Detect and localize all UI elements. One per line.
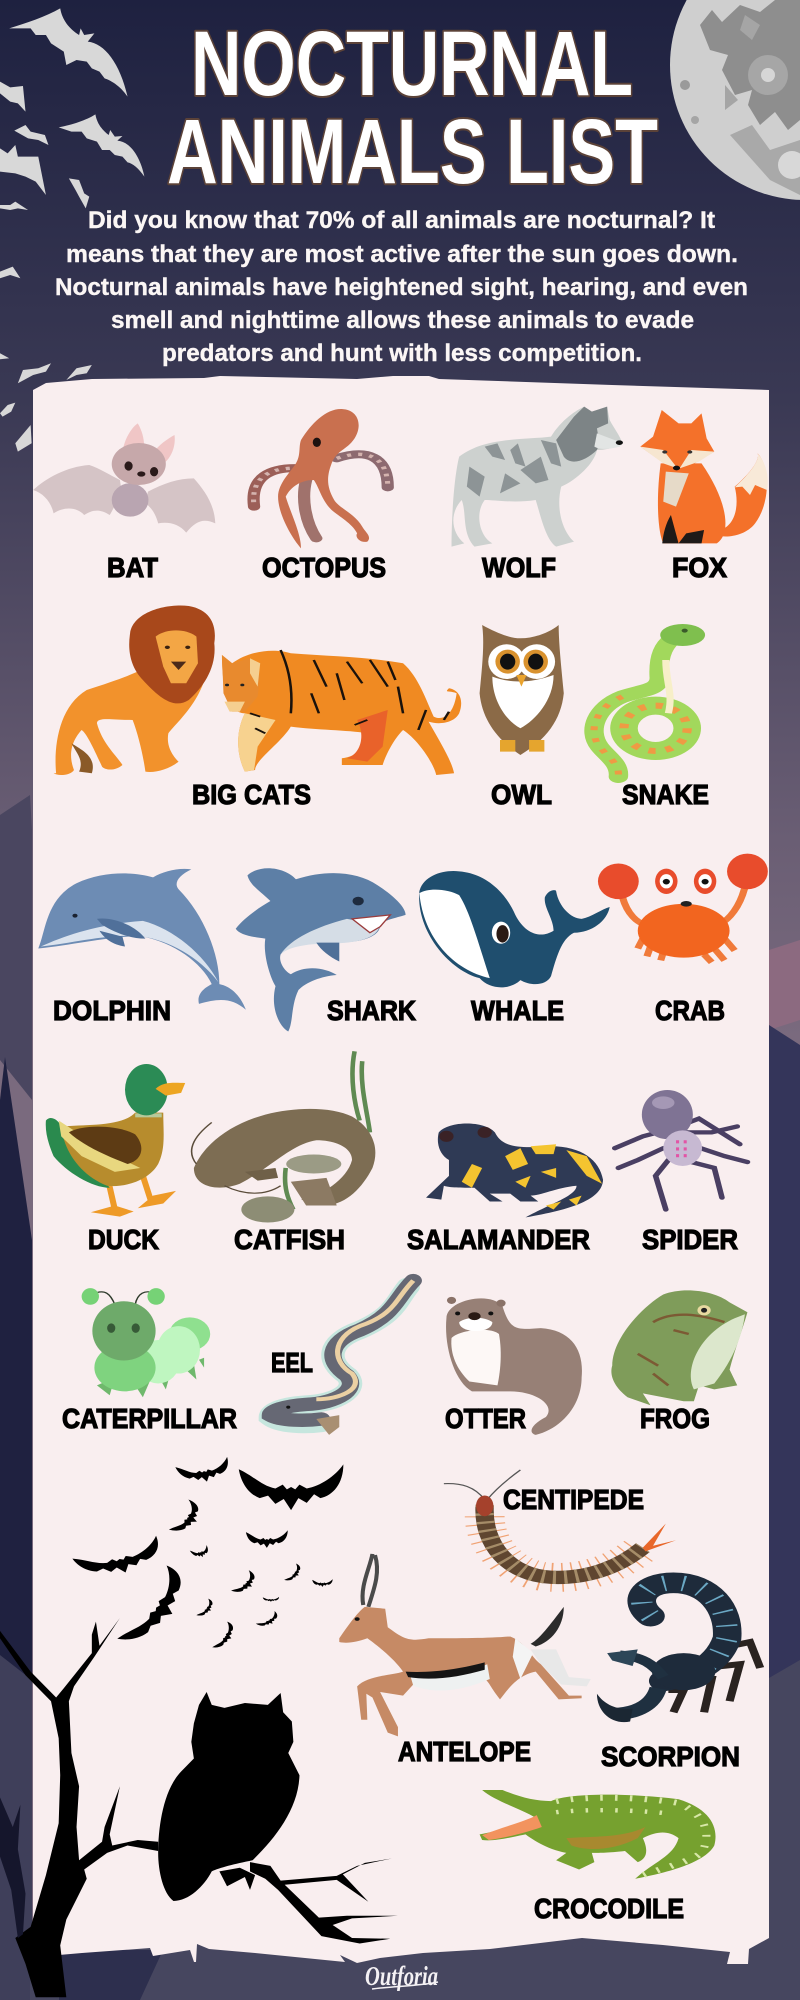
icon: large bat bbox=[9, 8, 128, 97]
label: bat: BAT bbox=[107, 552, 158, 583]
icon: centipede bbox=[444, 1470, 676, 1577]
footer logo: Outforia: Outforia bbox=[365, 1961, 438, 1991]
label: shark: SHARK bbox=[327, 995, 416, 1026]
label: crab: CRAB bbox=[655, 995, 725, 1026]
label: salamander: SALAMANDER bbox=[407, 1224, 590, 1255]
label: otter: OTTER bbox=[445, 1403, 526, 1434]
icon: salamander bbox=[426, 1123, 603, 1217]
icon: crocodile bbox=[480, 1790, 716, 1879]
animal: frog bbox=[611, 1290, 747, 1434]
label: spider: SPIDER bbox=[642, 1224, 738, 1255]
label: duck: DUCK bbox=[88, 1224, 159, 1255]
animal: catfish bbox=[192, 1051, 375, 1255]
animal: fox bbox=[640, 410, 768, 583]
icon: otter bbox=[446, 1297, 582, 1435]
decorative flock of pale bats bbox=[0, 8, 144, 452]
icon: antelope bbox=[339, 1554, 591, 1736]
label: caterpillar: CATERPILLAR bbox=[62, 1403, 237, 1434]
owl body bbox=[158, 1692, 299, 1901]
label: dolphin: DOLPHIN bbox=[53, 995, 171, 1026]
tree trunk and upper branches bbox=[0, 1618, 158, 1997]
animal: owl bbox=[480, 625, 564, 810]
intro text block: means that they are most active after the sun goes down. bbox=[66, 241, 738, 268]
label: snake: SNAKE bbox=[622, 779, 709, 810]
icon: octopus bbox=[254, 409, 388, 548]
icon: caterpillar bbox=[82, 1288, 210, 1397]
silhouette: owl on bare tree bbox=[0, 1618, 398, 1997]
animal: big cats bbox=[54, 606, 461, 810]
animal: snake bbox=[594, 624, 709, 810]
label: whale: WHALE bbox=[471, 995, 564, 1026]
icon: second bat bbox=[59, 114, 144, 177]
icon: shark bbox=[236, 868, 406, 1032]
title: ANIMALS LIST bbox=[167, 101, 658, 203]
icon: frog bbox=[611, 1290, 747, 1405]
icon: owl bbox=[480, 625, 564, 755]
animal: crab bbox=[598, 854, 768, 1026]
icon: spider bbox=[615, 1090, 747, 1209]
animal: bat bbox=[33, 423, 215, 583]
icon: whale bbox=[419, 871, 610, 987]
animal: otter bbox=[445, 1297, 582, 1435]
icon: snake bbox=[594, 624, 705, 777]
title: NOCTURNAL bbox=[191, 13, 633, 115]
animal: spider bbox=[615, 1090, 747, 1255]
icon: duck bbox=[46, 1064, 185, 1217]
intro text block: smell and nighttime allows these animals to evade bbox=[111, 307, 694, 334]
label: crocodile: CROCODILE bbox=[534, 1893, 684, 1924]
lower right branch bbox=[250, 1858, 398, 1944]
intro text block: Did you know that 70% of all animals are nocturnal? It bbox=[88, 207, 715, 234]
label: frog: FROG bbox=[640, 1403, 710, 1434]
animal: caterpillar bbox=[62, 1288, 237, 1434]
animal: duck bbox=[46, 1064, 185, 1255]
label: catfish: CATFISH bbox=[234, 1224, 345, 1255]
animal: scorpion bbox=[597, 1583, 760, 1772]
icon: eel bbox=[270, 1281, 413, 1435]
icon: catfish bbox=[192, 1051, 375, 1223]
icon: tiger bbox=[222, 650, 461, 775]
icon: scorpion bbox=[597, 1583, 760, 1722]
animal: crocodile bbox=[480, 1790, 716, 1924]
label: owl: OWL bbox=[491, 779, 552, 810]
label: scorpion: SCORPION bbox=[601, 1741, 740, 1772]
label: antelope: ANTELOPE bbox=[398, 1736, 531, 1767]
icon: wolf bbox=[452, 407, 623, 547]
label: octopus: OCTOPUS bbox=[262, 552, 386, 583]
icon: lion bbox=[54, 606, 215, 775]
icon: fox bbox=[640, 410, 768, 543]
panel: torn paper background bbox=[33, 376, 769, 1964]
animal: eel bbox=[270, 1281, 413, 1435]
intro text block: predators and hunt with less competition. bbox=[162, 340, 642, 367]
animal: octopus bbox=[254, 409, 388, 583]
icon: full moon bbox=[670, 0, 800, 200]
animal: salamander bbox=[407, 1123, 603, 1255]
animal: shark bbox=[236, 868, 416, 1032]
icon: dolphin bbox=[38, 869, 246, 1010]
animal: wolf bbox=[452, 407, 623, 583]
animal: centipede bbox=[444, 1470, 676, 1577]
icon: crab bbox=[598, 854, 768, 962]
animal: dolphin bbox=[38, 869, 246, 1026]
animal: whale bbox=[419, 871, 610, 1026]
label: big cats: BIG CATS bbox=[192, 779, 311, 810]
animal: antelope bbox=[339, 1554, 591, 1767]
icon: bat bbox=[33, 423, 215, 533]
intro text block: Nocturnal animals have heightened sight, hearing, and even bbox=[55, 274, 748, 301]
label: wolf: WOLF bbox=[482, 552, 556, 583]
label: eel: EEL bbox=[271, 1347, 313, 1378]
silhouette: flock of black bats bbox=[71, 1457, 343, 1651]
label: fox: FOX bbox=[672, 552, 727, 583]
title bbox=[167, 13, 658, 203]
label: centipede: CENTIPEDE bbox=[503, 1484, 644, 1515]
intro text block bbox=[55, 207, 748, 367]
